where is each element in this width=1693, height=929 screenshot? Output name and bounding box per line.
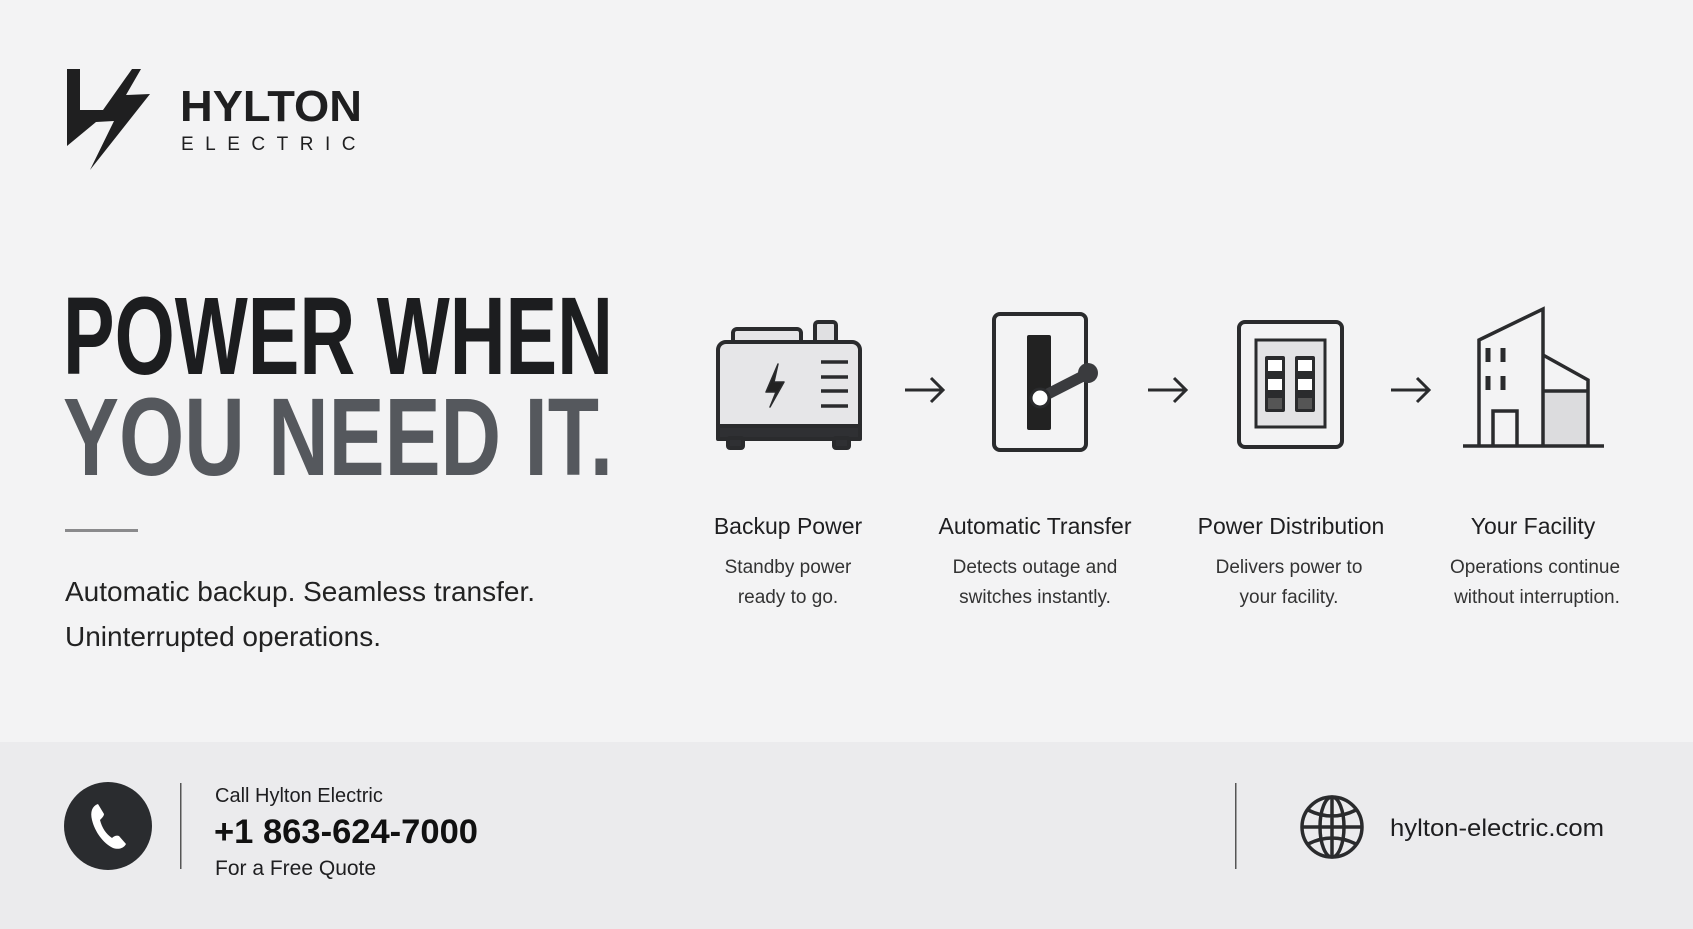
icon: logo bolt	[67, 69, 150, 170]
subtitle: Automatic backup. Seamless transfer.	[65, 576, 535, 607]
step 2 text: Detects outage and	[953, 557, 1117, 578]
icon: transfer switch	[994, 314, 1098, 450]
icon: generator	[718, 322, 860, 448]
step 1 text: Standby power	[725, 557, 852, 578]
step 4 text: without interruption.	[1453, 587, 1620, 608]
icon: distribution panel	[1239, 322, 1342, 447]
headline: POWER WHEN	[63, 275, 613, 398]
contact text: +1 863-624-7000	[214, 813, 478, 851]
step 3 text: your facility.	[1240, 587, 1338, 608]
logo	[67, 69, 367, 170]
step 3 text: Power Distribution	[1198, 513, 1384, 539]
brand subtitle: ELECTRIC	[181, 134, 367, 155]
step 1 text: ready to go.	[738, 587, 838, 608]
subtitle: Uninterrupted operations.	[65, 621, 381, 652]
arrow 3	[1391, 378, 1429, 402]
contact text: For a Free Quote	[215, 857, 376, 880]
icon: building	[1463, 309, 1604, 446]
footer	[0, 742, 1693, 929]
contact text	[214, 785, 478, 880]
arrow 1	[905, 378, 943, 402]
icon: phone	[64, 782, 152, 870]
step 2 text: switches instantly.	[959, 587, 1111, 608]
arrow 2	[1148, 378, 1186, 402]
brand name: HYLTON	[180, 82, 362, 131]
contact text: Call Hylton Electric	[215, 785, 383, 807]
subtitle	[65, 576, 535, 652]
headline: YOU NEED IT.	[63, 376, 613, 499]
website: hylton-electric.com	[1390, 815, 1604, 842]
step 1 text: Backup Power	[714, 513, 862, 539]
step 3 text	[1198, 513, 1384, 608]
step 2 text: Automatic Transfer	[938, 513, 1132, 539]
step 4 text: Operations continue	[1450, 557, 1620, 578]
icon: globe	[1302, 797, 1362, 857]
step 1 text	[714, 513, 862, 608]
step 4 text	[1450, 513, 1620, 608]
step 2 text	[938, 513, 1132, 608]
headline	[63, 275, 613, 499]
step 3 text: Delivers power to	[1216, 557, 1362, 578]
step 4 text: Your Facility	[1471, 513, 1596, 539]
